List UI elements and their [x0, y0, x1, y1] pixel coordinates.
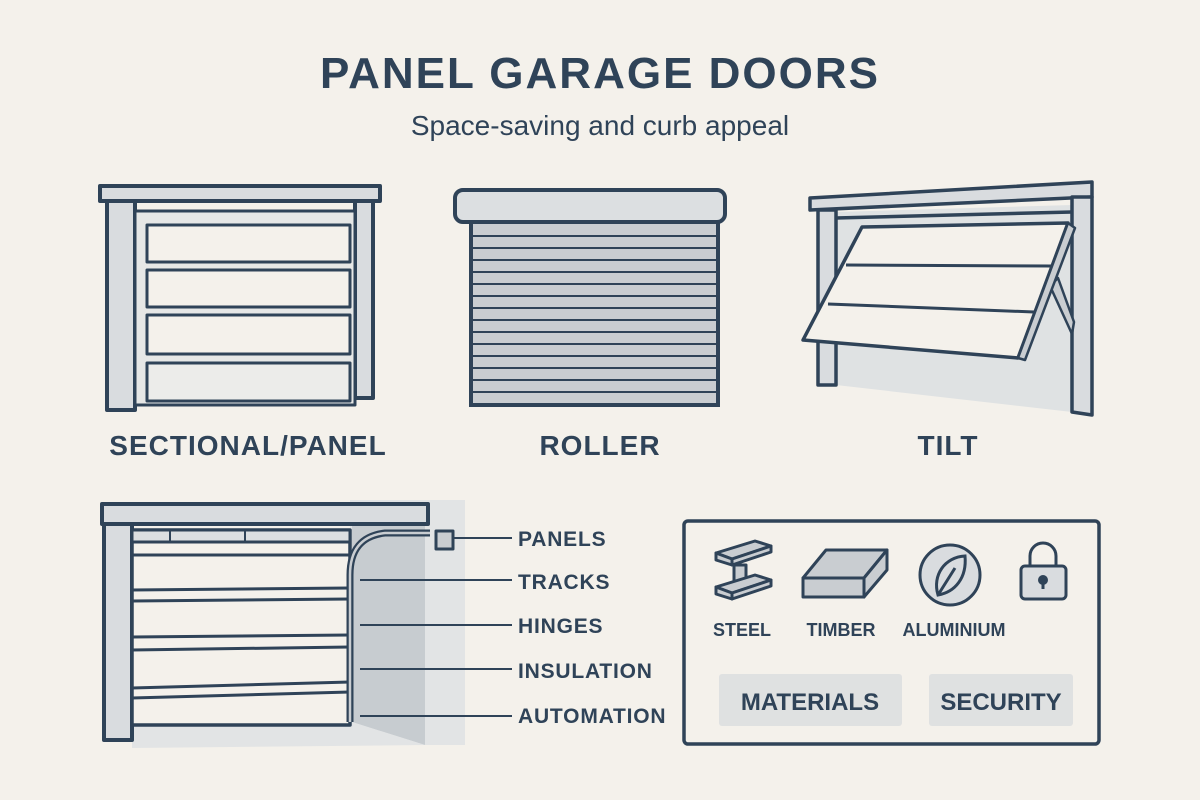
panel: anatomy diagram — [102, 500, 512, 748]
label: roller: ROLLER — [539, 430, 661, 461]
icon labels: TIMBER — [806, 620, 876, 640]
panel: roller door illustration — [455, 190, 725, 405]
label: sectional/panel: SECTIONAL/PANEL — [109, 430, 387, 461]
callout labels: INSULATION — [518, 660, 653, 683]
panel: tilt door illustration — [803, 182, 1092, 415]
title: PANEL GARAGE DOORS — [320, 49, 880, 98]
icon: padlock — [1021, 543, 1066, 599]
icon labels: ALUMINIUM — [903, 620, 1005, 640]
icon: aluminium leaf — [920, 545, 980, 605]
callout lines — [360, 538, 512, 716]
button: security: SECURITY — [940, 689, 1062, 716]
button: materials: MATERIALS — [741, 689, 879, 716]
button: security — [929, 674, 1073, 726]
panel: materials & security box — [684, 521, 1099, 744]
icon labels: STEEL — [713, 620, 771, 640]
callout labels: PANELS — [518, 528, 606, 551]
button: materials — [719, 674, 902, 726]
panel: sectional door illustration — [100, 186, 380, 410]
icon: steel beam — [716, 541, 771, 599]
icon: timber — [803, 550, 887, 597]
label: tilt: TILT — [917, 430, 979, 461]
callout labels: AUTOMATION — [518, 705, 666, 728]
icon labels — [713, 620, 1005, 640]
subtitle: Space-saving and curb appeal — [411, 110, 789, 141]
callout labels: TRACKS — [518, 571, 610, 594]
callout labels: HINGES — [518, 615, 603, 638]
callout labels — [518, 528, 666, 728]
